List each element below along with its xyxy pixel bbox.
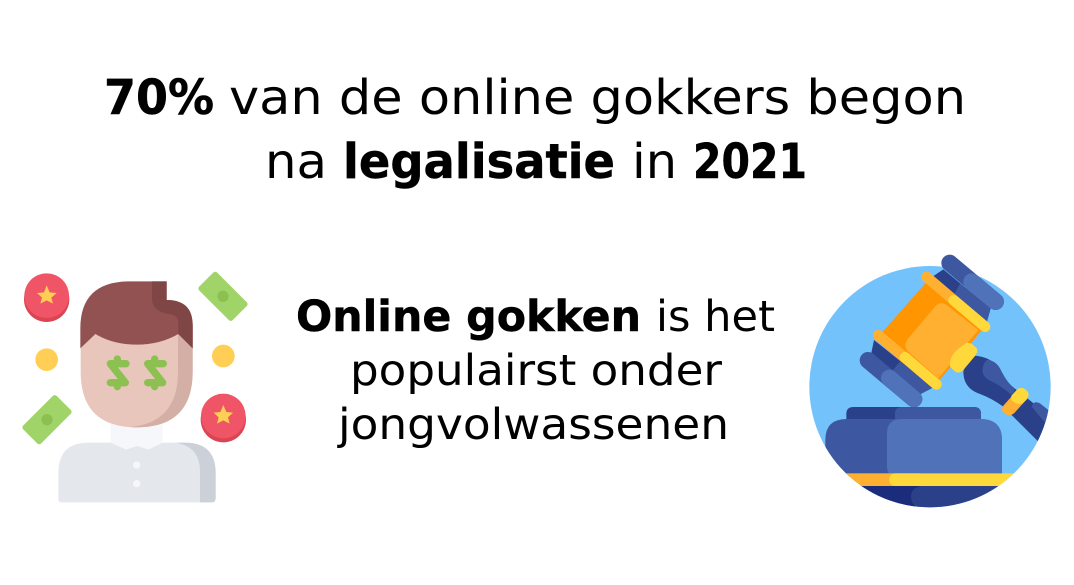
icon: gavel caps: [868, 263, 996, 399]
subtitle text: jongvolwassenen: [337, 400, 729, 450]
icon: shirt: [58, 417, 216, 502]
title: 70%: [104, 70, 214, 126]
icon: gold coins: [35, 345, 235, 371]
icon: hair: [80, 281, 193, 348]
icon: red coin top left: [24, 273, 69, 322]
title: legalisatie: [343, 134, 615, 190]
icon: handle ring: [1002, 388, 1029, 415]
subtitle text: is het: [656, 292, 775, 342]
subtitle text: Online gokken: [296, 292, 641, 342]
icon: banknote top right: [197, 271, 249, 322]
icon: sound block: [820, 407, 1020, 510]
title: [104, 70, 966, 190]
subtitle text: [296, 292, 775, 450]
icon: gavel handle: [963, 356, 1048, 441]
title: in: [632, 134, 677, 190]
icon: gavel head: [878, 277, 985, 384]
title: 2021: [693, 134, 807, 190]
icon: dollar eyes: [110, 359, 163, 387]
subtitle text: populairst onder: [350, 346, 722, 396]
icon: judge gavel: [809, 263, 1063, 510]
icon: face: [81, 323, 193, 427]
icon: man with dollar eyes and money: [21, 271, 249, 502]
icon: red coin right: [201, 394, 246, 442]
icon: blue circle background: [809, 266, 1051, 507]
title: na: [265, 134, 327, 190]
title: van de online gokkers begon: [229, 70, 966, 126]
icon: banknote bottom left: [21, 394, 73, 445]
